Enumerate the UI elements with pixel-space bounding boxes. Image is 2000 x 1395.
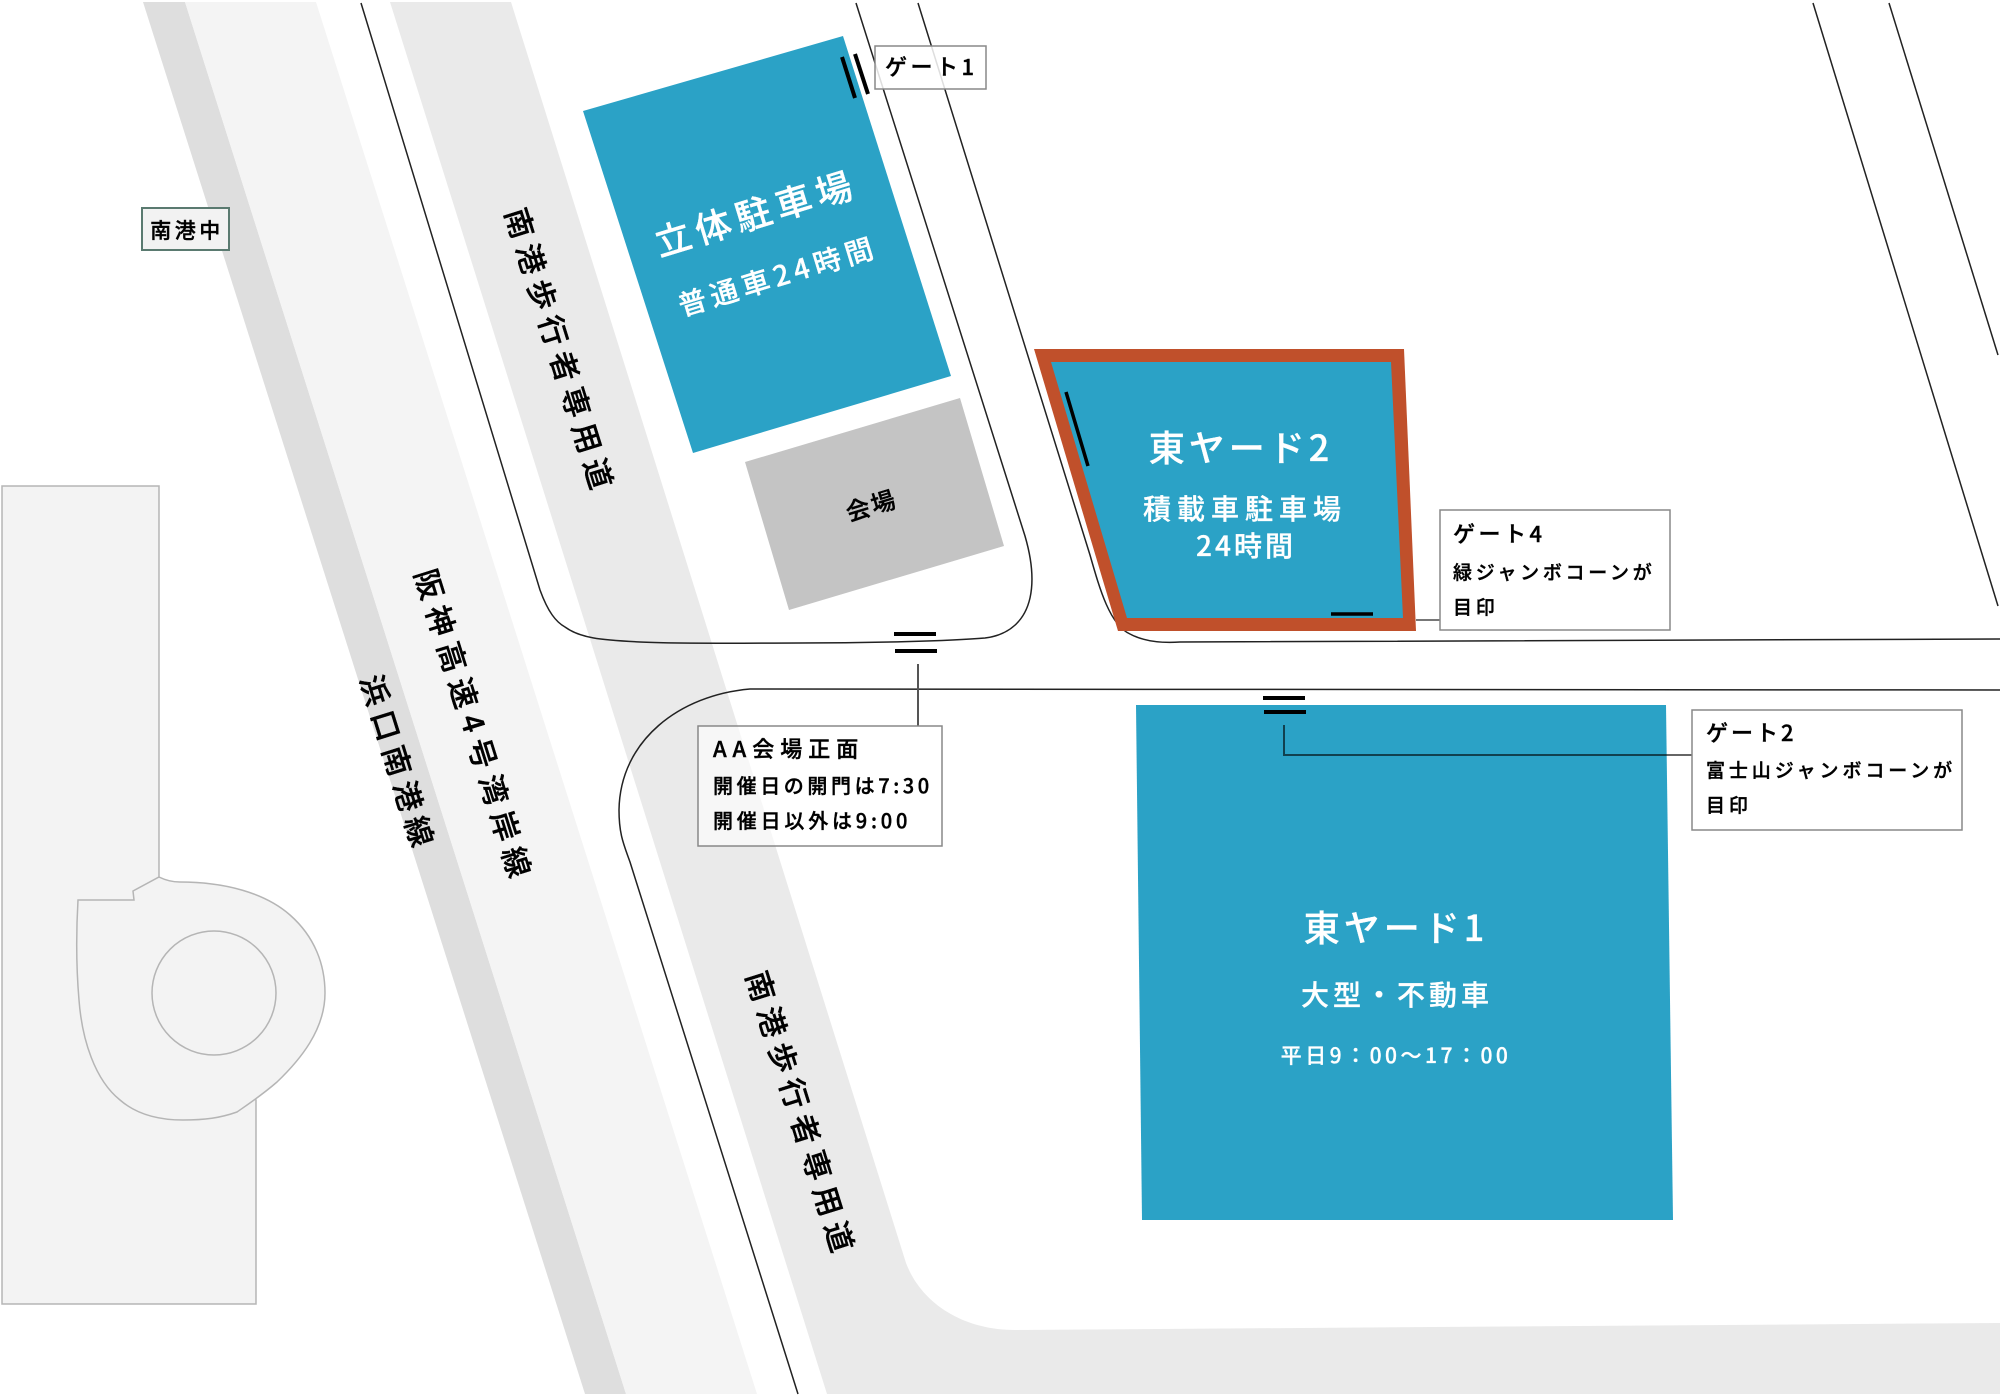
connector: main entrance <box>917 664 919 726</box>
road outline: south block <box>619 689 2000 1394</box>
callout: gate 4 <box>1440 510 1670 630</box>
callout: gate 1 <box>875 46 986 89</box>
gate marks: gate 3 on yard 2 <box>1066 392 1088 466</box>
callout: gate 2: 富士山ジャンボコーンが <box>1706 756 1956 783</box>
callout: main entrance <box>698 726 942 846</box>
panel: east yard 2 <box>1034 349 1416 631</box>
text: 24 hours: 24時間 <box>1196 525 1296 565</box>
gate marks: gate 2 <box>1263 698 1306 712</box>
stadium outline <box>77 877 325 1120</box>
callout: gate 4: 目印 <box>1453 593 1498 620</box>
road label: Hanshin Expressway Route 4: 阪神高速4号湾岸線 <box>406 563 546 890</box>
heading: east yard 2: 東ヤード2 <box>1149 420 1333 472</box>
stadium block <box>2 486 256 1304</box>
callout: main entrance: 開催日の開門は7:30 <box>713 770 933 799</box>
gate marks: gate 4 on yard 2 <box>1331 612 1373 616</box>
connector: gate 4 <box>1416 619 1440 621</box>
road: Hanshin Expressway <box>185 2 757 1394</box>
road: Hamaguchi Nanko line <box>143 2 626 1394</box>
road outline: venue loop <box>361 3 1032 643</box>
road outline: north-east lines <box>1813 3 1998 606</box>
text: loaded vehicle parking: 積載車駐車場 <box>1143 488 1347 528</box>
panel: east yard 1 <box>1136 705 1673 1220</box>
panel: multi-storey parking <box>583 36 951 453</box>
text: large and immobile vehicles: 大型・不動車 <box>1301 974 1493 1014</box>
callout: Nanko-naka: 南港中 <box>150 215 224 245</box>
gate marks: main entrance <box>894 634 937 651</box>
callout: gate 4: ゲート4 <box>1453 517 1546 549</box>
panel: venue building <box>745 398 1004 610</box>
callout: gate 4: 緑ジャンボコーンが <box>1453 558 1655 585</box>
callout: Nanko-naka <box>142 208 229 250</box>
text: regular cars 24 hours: 普通車24時間 <box>673 226 883 325</box>
road label: pedestrian walkway north: 南港歩行者専用道 <box>496 202 628 501</box>
callout: main entrance: 開催日以外は9:00 <box>713 805 911 834</box>
heading: east yard 1: 東ヤード1 <box>1304 900 1488 952</box>
heading: multi-storey parking: 立体駐車場 <box>648 156 864 267</box>
road label: Hamaguchi Nanko line: 浜口南港線 <box>351 669 449 858</box>
gate marks: gate 1 <box>842 54 868 98</box>
callout: gate 2 <box>1692 710 1962 830</box>
callout: gate 2: 目印 <box>1706 791 1752 818</box>
road label: pedestrian walkway south: 南港歩行者専用道 <box>737 965 869 1264</box>
text: weekday hours: 平日9：00～17：00 <box>1281 1040 1511 1070</box>
callout: gate 1: ゲート1 <box>885 50 978 82</box>
callout: main entrance: AA会場正面 <box>713 732 864 764</box>
connector: gate 2 <box>1284 725 1692 755</box>
callout: gate 2: ゲート2 <box>1706 716 1797 748</box>
label: venue: 会場 <box>841 480 901 528</box>
road outline: east yard block <box>918 3 2000 642</box>
